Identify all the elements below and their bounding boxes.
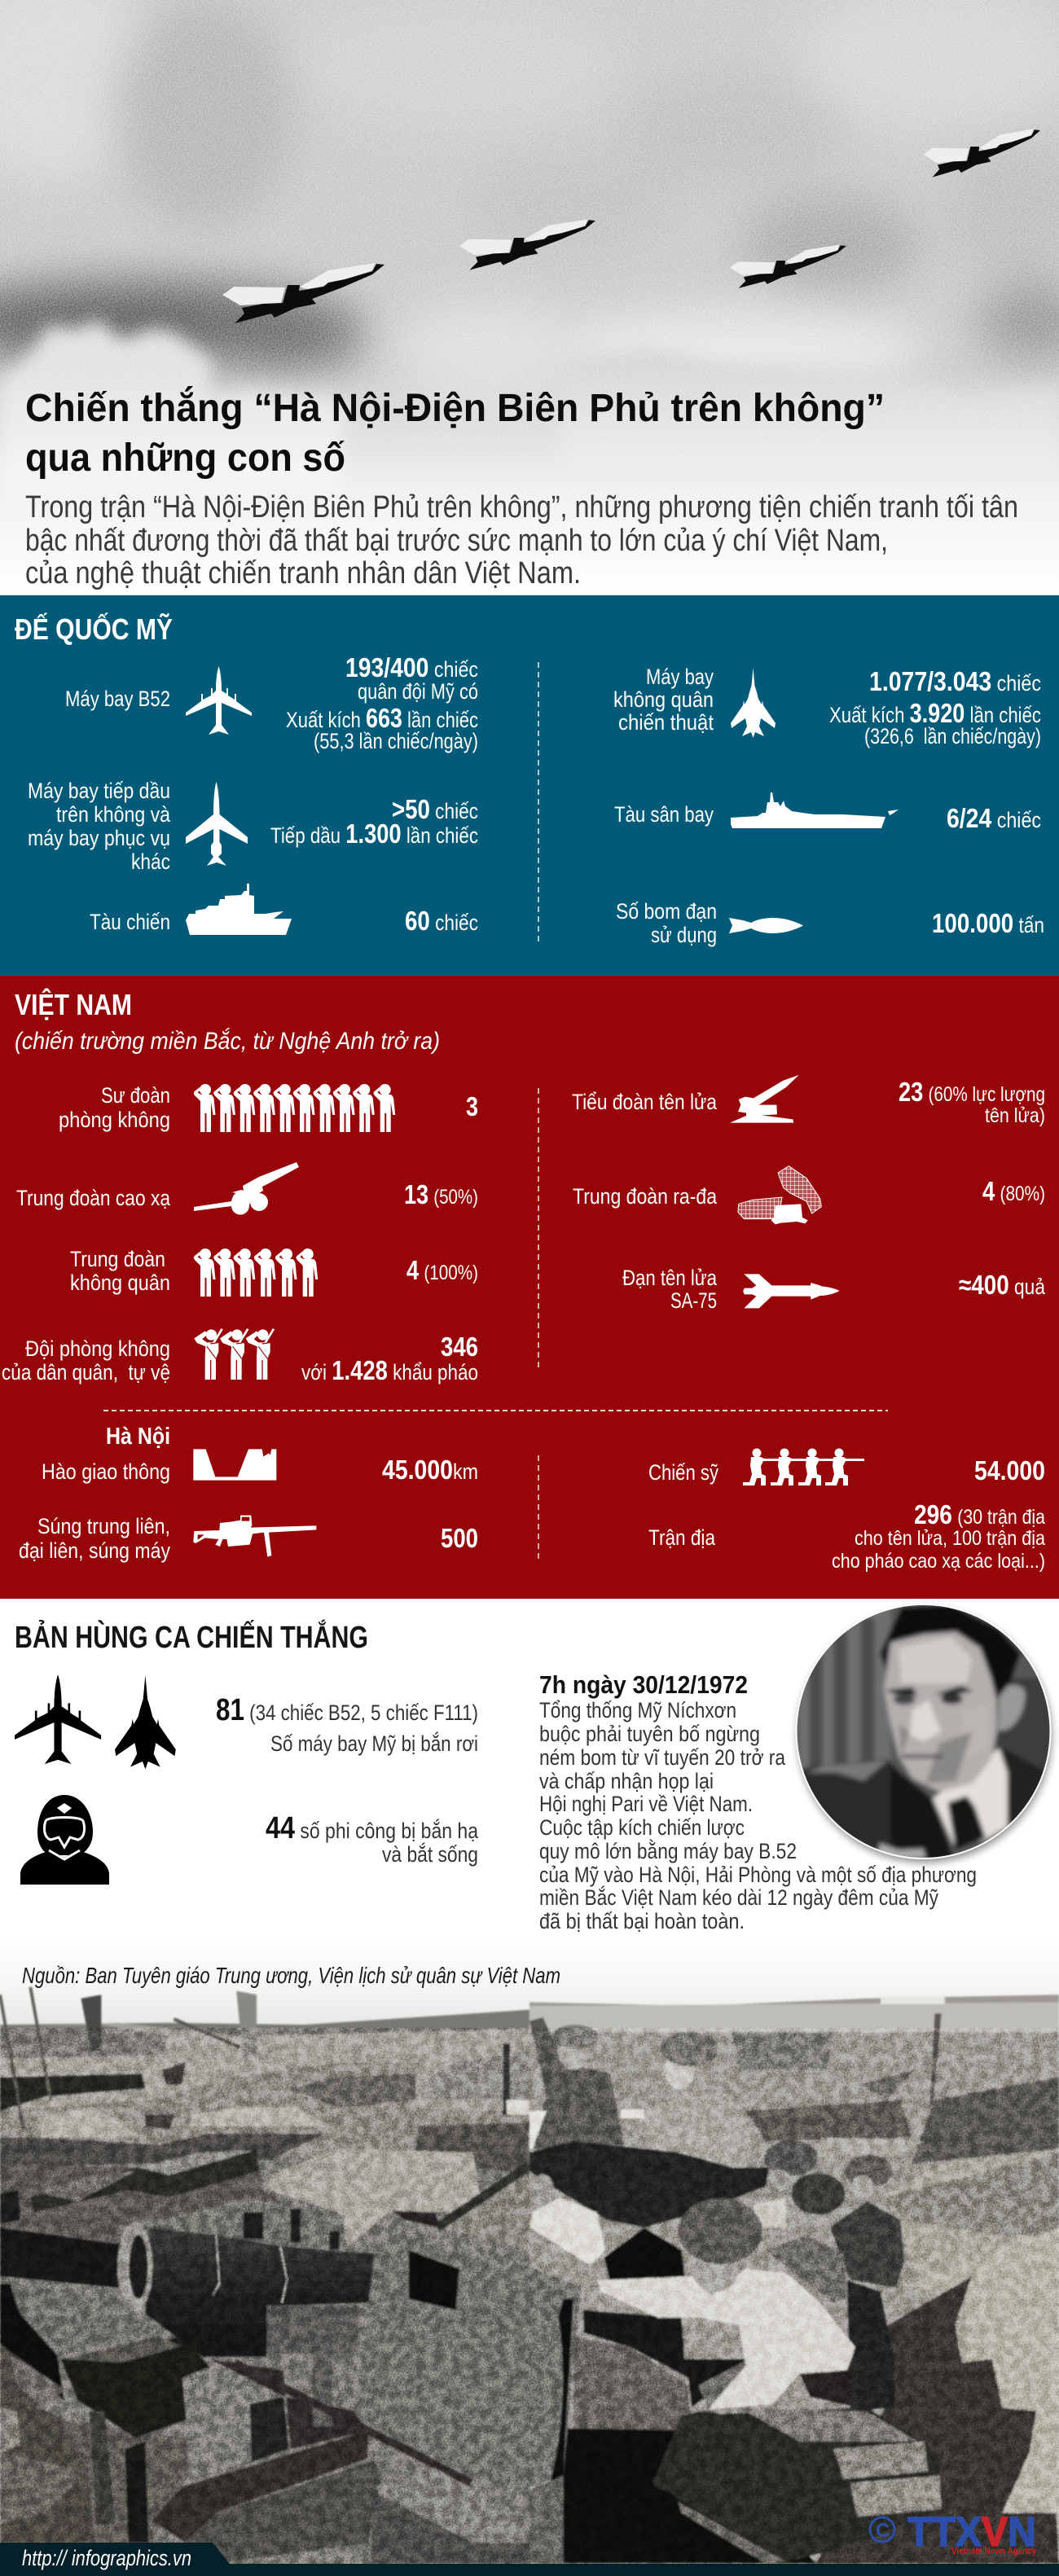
footer bar with URL: http:// infographics.vn xyxy=(22,2546,191,2570)
stat: aircraft shot down: 81 (34 chiếc B52, 5 chiếc F111) xyxy=(216,1693,478,1727)
photo: anti-aircraft gun crew xyxy=(0,1938,1059,2576)
intro paragraph: bậc nhất đương thời đã thất bại trước sức mạnh to lớn của ý chí Việt Nam, xyxy=(25,524,888,558)
row: aircraft carriers: Tàu sân bay xyxy=(614,802,714,827)
heading: VIỆT NAM xyxy=(15,987,132,1021)
row: tanker aircraft: Tiếp dầu 1.300 lần chiếc xyxy=(270,818,478,849)
stat: aircraft shot down: Số máy bay Mỹ bị bắn rơi xyxy=(270,1731,478,1756)
left half of photo xyxy=(0,1987,530,2576)
row: tactical aircraft: chiến thuật xyxy=(618,710,714,735)
row: machine guns: Súng trung liên, xyxy=(37,1514,170,1538)
row: trenches: Hào giao thông xyxy=(42,1459,170,1484)
icon: flying jet 2 xyxy=(459,219,595,270)
icon: B52 black xyxy=(15,1674,101,1764)
row: air force regiments: Trung đoàn xyxy=(70,1247,165,1271)
row: air defence divisions: Sư đoàn xyxy=(101,1083,170,1108)
subheading: (chiến trường miền Bắc, từ Nghệ Anh trở ra) xyxy=(15,1028,440,1055)
logo: TTXVN: C xyxy=(876,2520,890,2542)
row: militia air defence teams: Đội phòng không xyxy=(25,1336,170,1361)
row: militia air defence teams: với 1.428 khẩu pháo xyxy=(301,1355,478,1385)
heading: BẢN HÙNG CA CHIẾN THẮNG xyxy=(15,1619,368,1655)
row: radar regiments xyxy=(573,1166,1045,1224)
icon: flying jet 4 xyxy=(924,129,1040,178)
row: tanker aircraft xyxy=(28,779,478,874)
row: B52: 193/400 chiếc xyxy=(345,652,478,682)
text block: 30/12/1972: Tổng thống Mỹ Níchxơn xyxy=(539,1698,736,1722)
intro paragraph xyxy=(25,490,1018,590)
row: warships xyxy=(90,884,478,936)
text block: 30/12/1972: miền Bắc Việt Nam kéo dài 12 ngày đêm của Mỹ xyxy=(539,1885,938,1910)
stat: pilots captured: 44 số phi công bị bắn hạ xyxy=(266,1811,479,1845)
row: SA-75 missiles xyxy=(622,1266,1046,1313)
row: trenches: 45.000km xyxy=(382,1455,478,1485)
panel: Đế quốc Mỹ xyxy=(0,595,1059,976)
row: warships: Tàu chiến xyxy=(90,910,170,934)
row: bombs: Số bom đạn xyxy=(616,899,717,924)
icon: fighter jet black xyxy=(115,1675,176,1769)
row: B52: quân đội Mỹ có xyxy=(358,679,478,704)
row: missile battalions: Tiểu đoàn tên lửa xyxy=(572,1090,718,1114)
row: radar regiments: 4 (80%) xyxy=(982,1176,1045,1206)
row: soldiers: Chiến sỹ xyxy=(648,1460,718,1485)
row: tanker aircraft: máy bay phục vụ xyxy=(28,826,170,850)
title: qua những con số xyxy=(25,437,345,480)
panel: victory section text xyxy=(15,1619,977,1933)
row: aircraft carriers xyxy=(614,792,1041,833)
row: tactical aircraft xyxy=(613,665,1041,748)
row: tactical aircraft: Xuất kích 3.920 lần chiếc xyxy=(829,698,1041,728)
stat: pilots captured: và bắt sống xyxy=(382,1841,478,1867)
row: bombs xyxy=(616,899,1044,947)
icon: pilot xyxy=(20,1795,109,1885)
row: aircraft carriers: 6/24 chiếc xyxy=(947,803,1041,833)
row: SA-75 missiles: Đạn tên lửa xyxy=(622,1266,718,1290)
row: air force regiments: không quân xyxy=(70,1270,170,1295)
title xyxy=(25,385,885,480)
row: air defence divisions: 3 xyxy=(466,1091,478,1121)
row: militia air defence teams xyxy=(2,1329,478,1385)
row: air force regiments xyxy=(70,1247,478,1297)
portrait: Nixon xyxy=(793,1602,1053,1863)
text block: 30/12/1972: và chấp nhận họp lại xyxy=(539,1769,714,1793)
row: radar regiments: Trung đoàn ra-đa xyxy=(573,1184,718,1209)
row: tanker aircraft: khác xyxy=(131,849,170,874)
row: tactical aircraft: Máy bay xyxy=(646,665,714,689)
right half of photo xyxy=(530,1995,1059,2576)
logo: TTXVN: Vietnam News Agency xyxy=(951,2545,1036,2556)
text block: 30/12/1972: quy mô lớn bằng máy bay B.52 xyxy=(539,1838,797,1863)
row: SA-75 missiles: SA-75 xyxy=(670,1288,717,1313)
row: missile battalions: tên lửa) xyxy=(985,1104,1045,1127)
row: bombs: sử dụng xyxy=(651,923,717,947)
heading: ĐẾ QUỐC MỸ xyxy=(15,612,173,646)
row: B52: Xuất kích 663 lần chiếc xyxy=(286,703,478,733)
row: trenches xyxy=(42,1449,478,1485)
panel: Việt Nam xyxy=(0,976,1059,1599)
row: air force regiments: 4 (100%) xyxy=(406,1255,478,1285)
row: tanker aircraft: trên không và xyxy=(56,802,171,827)
row: positions: 296 (30 trận địa xyxy=(914,1499,1045,1529)
row: B52: Máy bay B52 xyxy=(65,687,170,711)
panel: header with aircraft photo xyxy=(0,0,1059,595)
row: B52 xyxy=(65,652,478,753)
logo: TTXVN: TTXVN xyxy=(907,2508,1036,2555)
row: machine guns: đại liên, súng máy xyxy=(19,1538,170,1563)
row: machine guns: 500 xyxy=(441,1523,478,1553)
icon: flying jet 1 xyxy=(222,263,384,323)
row: anti-aircraft regiments xyxy=(16,1162,478,1214)
row: militia air defence teams: của dân quân, tự vệ xyxy=(2,1360,170,1385)
row: bombs: 100.000 tấn xyxy=(932,908,1044,938)
text block: 30/12/1972: ném bom từ vĩ tuyến 20 trở ra xyxy=(539,1745,786,1770)
title: Chiến thắng “Hà Nội-Điện Biên Phủ trên không” xyxy=(25,385,885,430)
text block: 30/12/1972: Hội nghị Pari về Việt Nam. xyxy=(539,1792,753,1816)
row: soldiers xyxy=(648,1448,1045,1485)
subheading: Hà Nội: Hà Nội xyxy=(106,1424,170,1450)
row: SA-75 missiles: ≈400 quả xyxy=(959,1270,1046,1300)
row: militia air defence teams: 346 xyxy=(441,1332,478,1362)
row: soldiers: 54.000 xyxy=(974,1455,1045,1485)
row: positions xyxy=(648,1499,1045,1573)
photo: cloudy sky xyxy=(0,0,1059,595)
stat: aircraft shot down xyxy=(216,1693,478,1756)
row: positions: Trận địa xyxy=(648,1525,716,1550)
text block: 30/12/1972 xyxy=(539,1670,977,1933)
row: missile battalions xyxy=(572,1075,1045,1127)
stat: pilots captured xyxy=(266,1811,479,1867)
row: tanker aircraft: >50 chiếc xyxy=(392,794,478,824)
text block: 30/12/1972: của Mỹ vào Hà Nội, Hải Phòng và một số địa phương xyxy=(539,1863,977,1887)
row: machine guns xyxy=(19,1514,478,1563)
intro paragraph: của nghệ thuật chiến tranh nhân dân Việt Nam. xyxy=(25,556,581,590)
text block: 30/12/1972: Cuộc tập kích chiến lược xyxy=(539,1815,745,1840)
row: anti-aircraft regiments: 13 (50%) xyxy=(404,1179,478,1209)
footer bar with URL xyxy=(0,2543,1059,2576)
row: tanker aircraft: Máy bay tiếp dầu xyxy=(28,779,170,803)
text block: 30/12/1972: đã bị thất bại hoàn toàn. xyxy=(539,1909,745,1933)
row: warships: 60 chiếc xyxy=(405,906,478,936)
icon: flying jet 3 xyxy=(730,245,846,288)
text block: 30/12/1972: 7h ngày 30/12/1972 xyxy=(539,1670,748,1699)
row: anti-aircraft regiments: Trung đoàn cao xạ xyxy=(16,1186,171,1210)
row: B52: (55,3 lần chiếc/ngày) xyxy=(314,729,478,753)
row: tactical aircraft: không quân xyxy=(613,687,714,712)
source note: Nguồn: Ban Tuyên giáo Trung ương, Viện lịch sử quân sự Việt Nam xyxy=(22,1963,560,1988)
text block: 30/12/1972: buộc phải tuyên bố ngừng xyxy=(539,1722,760,1746)
row: air defence divisions xyxy=(59,1083,478,1132)
row: air defence divisions: phòng không xyxy=(59,1108,170,1132)
row: tactical aircraft: 1.077/3.043 chiếc xyxy=(869,666,1041,696)
